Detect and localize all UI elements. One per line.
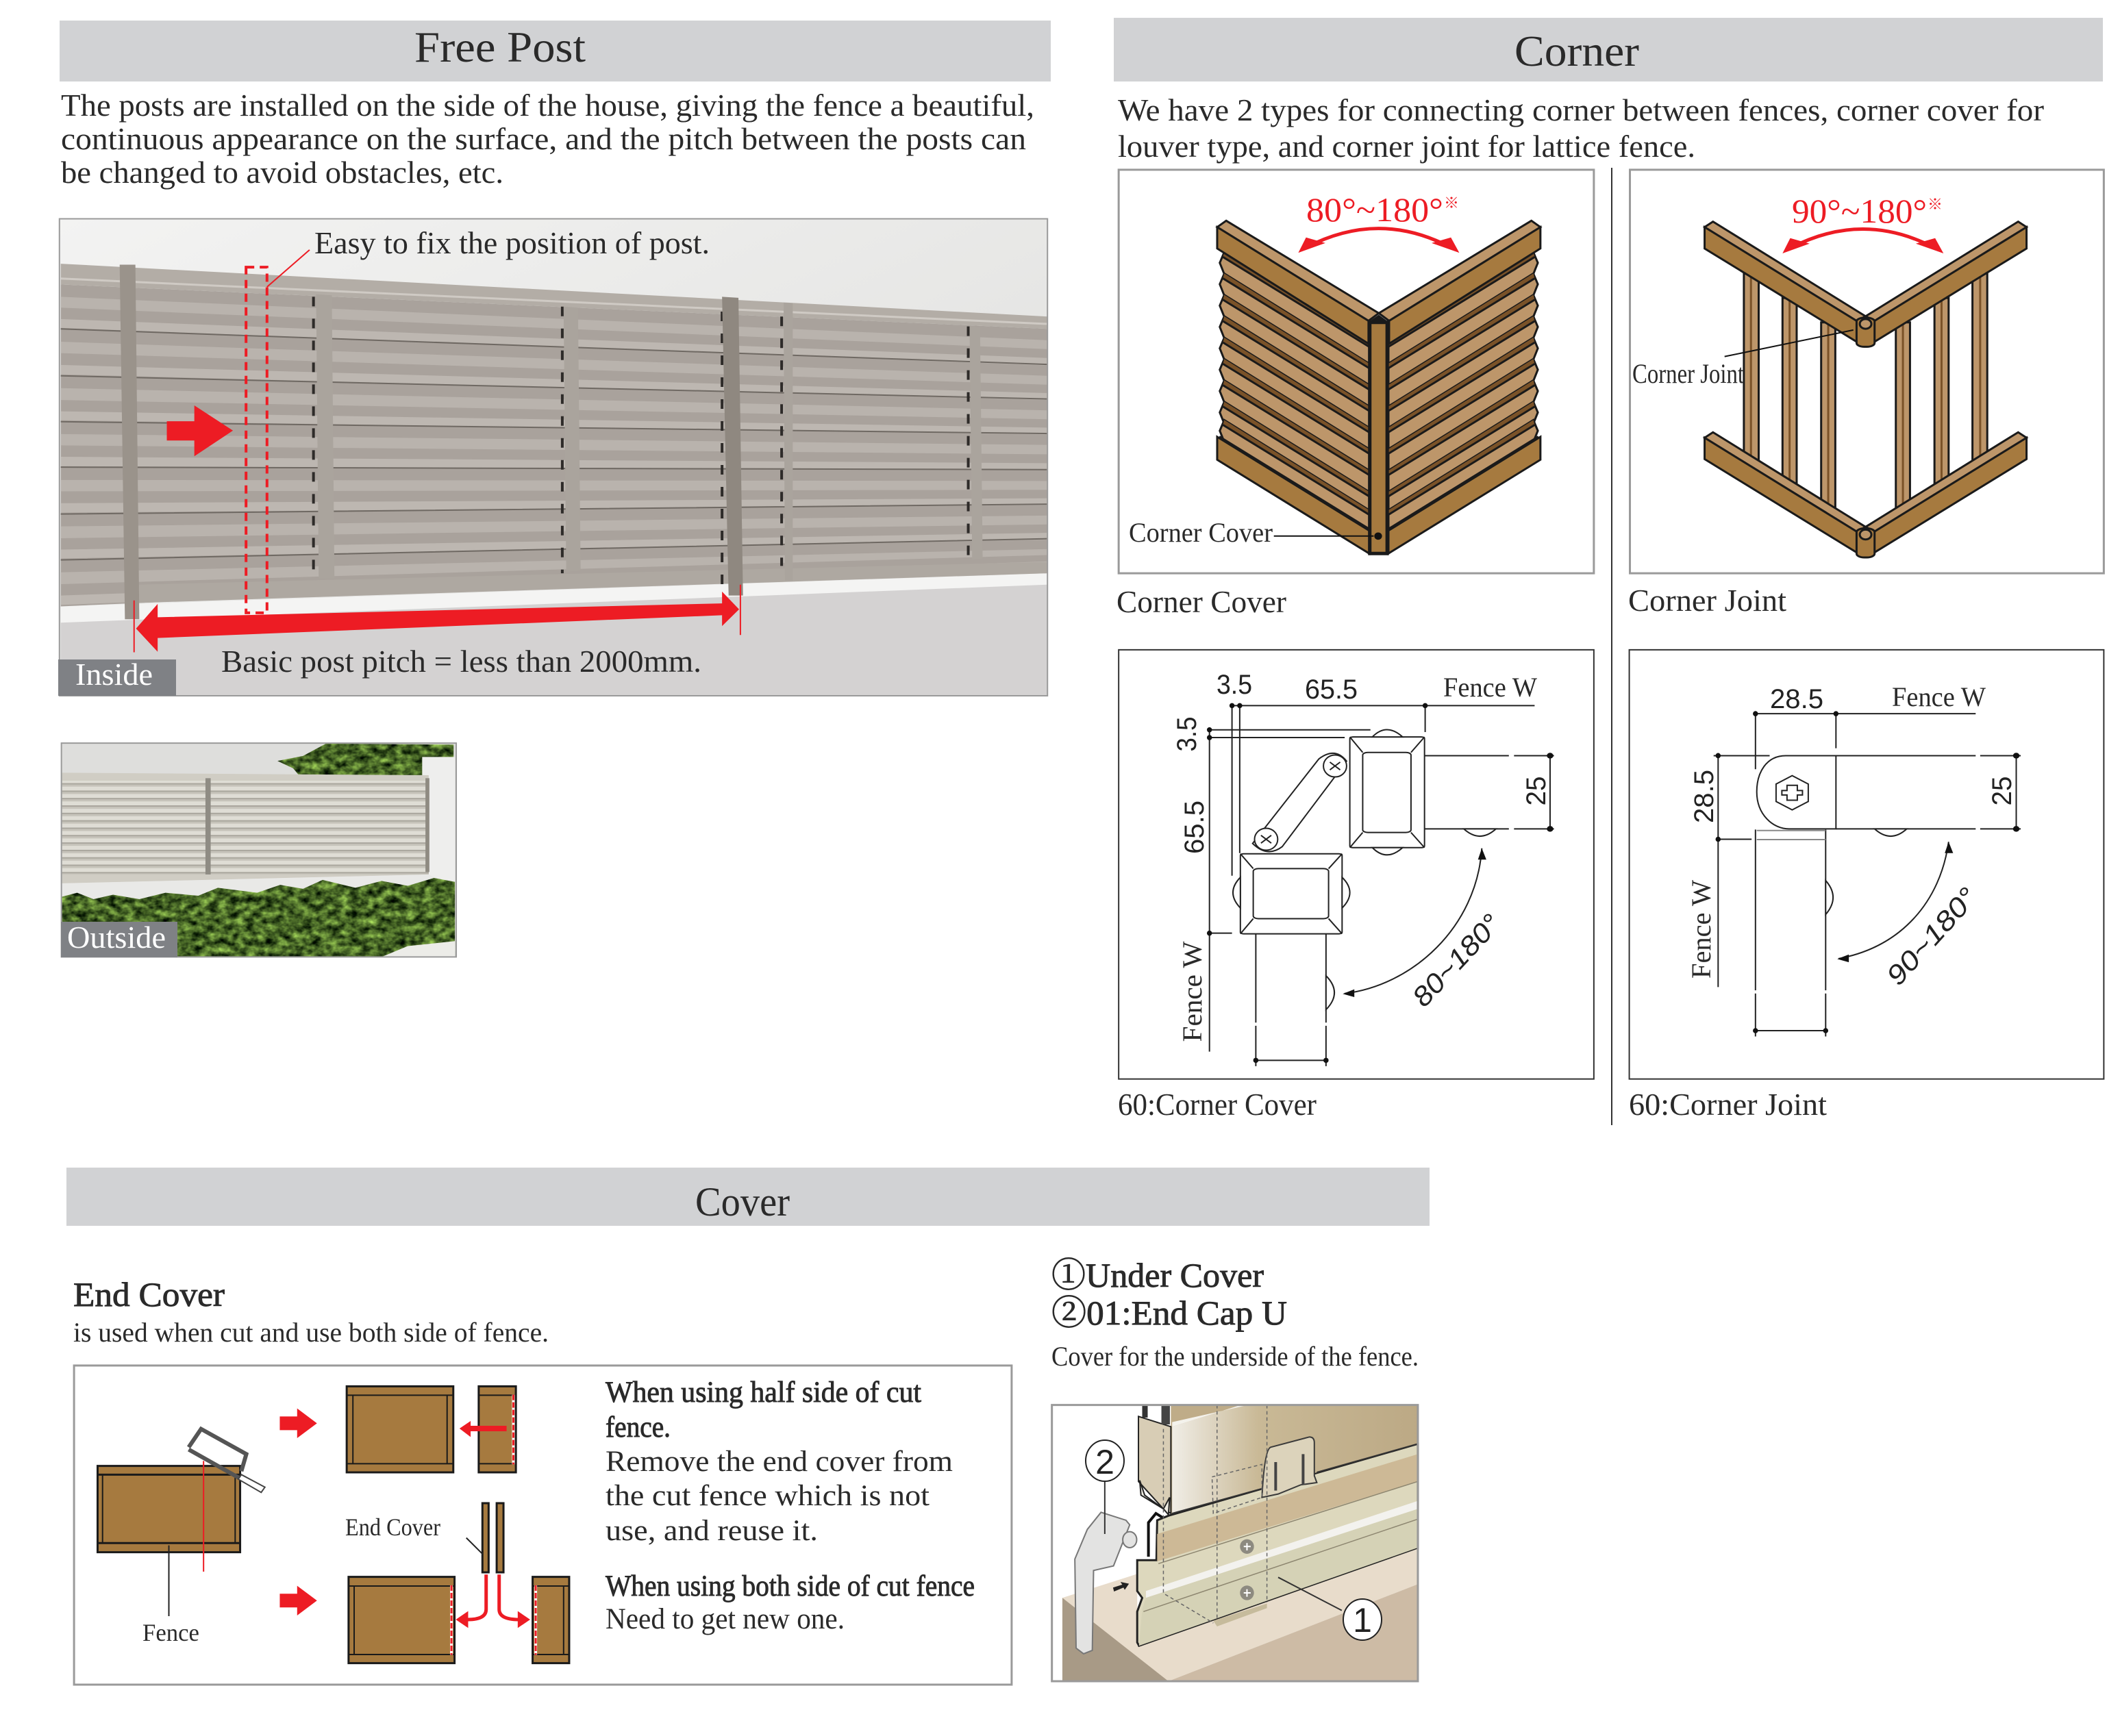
heading: free post bbox=[60, 21, 1051, 81]
heading: corner: Corner bbox=[1514, 27, 1639, 75]
text block: both sides instructions bbox=[606, 1570, 975, 1635]
label: fence: Fence bbox=[142, 1619, 199, 1646]
photo: outside view of fence bbox=[61, 743, 456, 957]
label: corner cover callout: Corner Cover bbox=[1129, 517, 1273, 548]
panel: cover bbox=[66, 1168, 1430, 1685]
heading: free post: Free Post bbox=[414, 23, 586, 71]
dimension labels: corner joint: 28.5 bbox=[1770, 684, 1823, 714]
label: 80 to 180 degrees: 80°~180° bbox=[1306, 190, 1443, 229]
panel: free post bbox=[58, 21, 1051, 957]
panel: corner bbox=[1114, 18, 2104, 1125]
text block: half side instructions: Remove the end cover from bbox=[606, 1446, 953, 1478]
arrow: toward post position bbox=[167, 405, 233, 456]
arrow: 80 to 180 degree arc bbox=[1298, 229, 1459, 253]
tag: inside: Inside bbox=[75, 657, 153, 692]
arrow: post pitch span bbox=[134, 585, 740, 653]
dimension labels: corner joint: Fence W bbox=[1686, 880, 1717, 979]
heading: cover: Cover bbox=[695, 1179, 790, 1224]
label: 80 to 180 degrees: ※ bbox=[1444, 194, 1459, 212]
heading: cover bbox=[66, 1168, 1430, 1226]
dimension labels: corner joint: 90~180° bbox=[1881, 882, 1984, 991]
text block: half side instructions bbox=[606, 1376, 953, 1547]
tag: outside: Outside bbox=[67, 920, 166, 955]
dimension labels: corner cover: Fence W bbox=[1443, 672, 1537, 703]
dimension labels: corner cover: Fence W bbox=[1177, 941, 1208, 1042]
dimension labels: corner joint bbox=[1686, 681, 2017, 991]
illustration: under cover and end cap bbox=[1052, 1405, 1418, 1681]
caption: corner cover: Corner Cover bbox=[1117, 584, 1286, 619]
callout: number 1 bbox=[1343, 1599, 1382, 1640]
dimension labels: corner joint: 28.5 bbox=[1689, 770, 1719, 823]
callout: number 1: 1 bbox=[1353, 1601, 1372, 1639]
text block: half side instructions: the cut fence which is not bbox=[606, 1480, 930, 1512]
illustration: corner joint lattice bbox=[1630, 170, 2104, 573]
caption: 60 corner cover: 60:Corner Cover bbox=[1118, 1087, 1317, 1122]
dimension labels: corner cover bbox=[1172, 670, 1551, 1042]
text block: free post description: continuous appearance on the surface, and the pitch between the posts can bbox=[61, 121, 1026, 156]
text block: free post description: The posts are installed on the side of the house, giving the fence a beautiful, bbox=[61, 88, 1034, 123]
callout: number 2 bbox=[1086, 1440, 1124, 1481]
illustration: corner cover louver bbox=[1119, 170, 1594, 573]
text block: corner description: We have 2 types for connecting corner between fences, corner cover for bbox=[1118, 92, 2044, 127]
dimension labels: corner joint: 25 bbox=[1987, 777, 2017, 805]
label: easy to fix: Easy to fix the position of post. bbox=[314, 225, 710, 260]
diagram: 60 corner joint dimensions bbox=[1630, 650, 2104, 1079]
panel: end cover instructions bbox=[74, 1366, 1012, 1685]
label: post pitch: Basic post pitch = less than 2000mm. bbox=[221, 644, 701, 679]
label: 90 to 180 degrees: ※ bbox=[1928, 196, 1943, 213]
text block: corner description bbox=[1118, 92, 2044, 164]
heading: corner bbox=[1114, 18, 2103, 81]
diagram: 60 corner cover dimensions bbox=[1119, 650, 1594, 1079]
label: corner joint callout: Corner Joint bbox=[1632, 358, 1744, 389]
text block: both sides instructions: Need to get new one. bbox=[606, 1603, 845, 1635]
text block: free post description: be changed to avoid obstacles, etc. bbox=[61, 155, 503, 190]
arrow: 90 to 180 degree arc bbox=[1782, 229, 1943, 253]
dimension labels: corner cover: 80~180° bbox=[1407, 909, 1507, 1013]
dimension labels: corner cover: 3.5 bbox=[1172, 716, 1202, 752]
label: 90 to 180 degrees: 90°~180° bbox=[1792, 192, 1927, 230]
text block: end cover use: is used when cut and use both side of fence. bbox=[73, 1317, 549, 1348]
caption: 60 corner joint: 60:Corner Joint bbox=[1629, 1087, 1827, 1122]
callout: number 2: 2 bbox=[1095, 1443, 1114, 1481]
caption: corner joint: Corner Joint bbox=[1628, 583, 1786, 618]
dimension labels: corner cover: 3.5 bbox=[1217, 670, 1252, 700]
dimension labels: corner cover: 25 bbox=[1521, 777, 1551, 805]
dimension labels: corner joint: Fence W bbox=[1892, 681, 1986, 712]
dimension labels: corner cover: 65.5 bbox=[1305, 675, 1358, 705]
callout: dashed post position bbox=[246, 250, 310, 613]
text block: half side instructions: use, and reuse it. bbox=[606, 1515, 818, 1547]
text block: half side instructions: fence. bbox=[606, 1411, 671, 1444]
text block: both sides instructions: When using both side of cut fence bbox=[606, 1570, 975, 1602]
text block: free post description bbox=[61, 88, 1034, 190]
heading: under cover and end cap: ①Under Cover bbox=[1051, 1256, 1264, 1294]
text block: under cover use: Cover for the underside of the fence. bbox=[1051, 1341, 1419, 1372]
photo: inside view of fence bbox=[58, 218, 1047, 696]
heading: end cover: End Cover bbox=[73, 1275, 225, 1313]
label: end cover: End Cover bbox=[345, 1513, 440, 1541]
heading: under cover and end cap: ②01:End Cap U bbox=[1051, 1294, 1287, 1332]
dimension labels: corner cover: 65.5 bbox=[1180, 801, 1210, 854]
tag: inside bbox=[58, 657, 176, 696]
text block: half side instructions: When using half side of cut bbox=[606, 1376, 921, 1409]
text block: corner description: louver type, and corner joint for lattice fence. bbox=[1118, 129, 1695, 164]
heading: under cover and end cap bbox=[1051, 1256, 1287, 1332]
